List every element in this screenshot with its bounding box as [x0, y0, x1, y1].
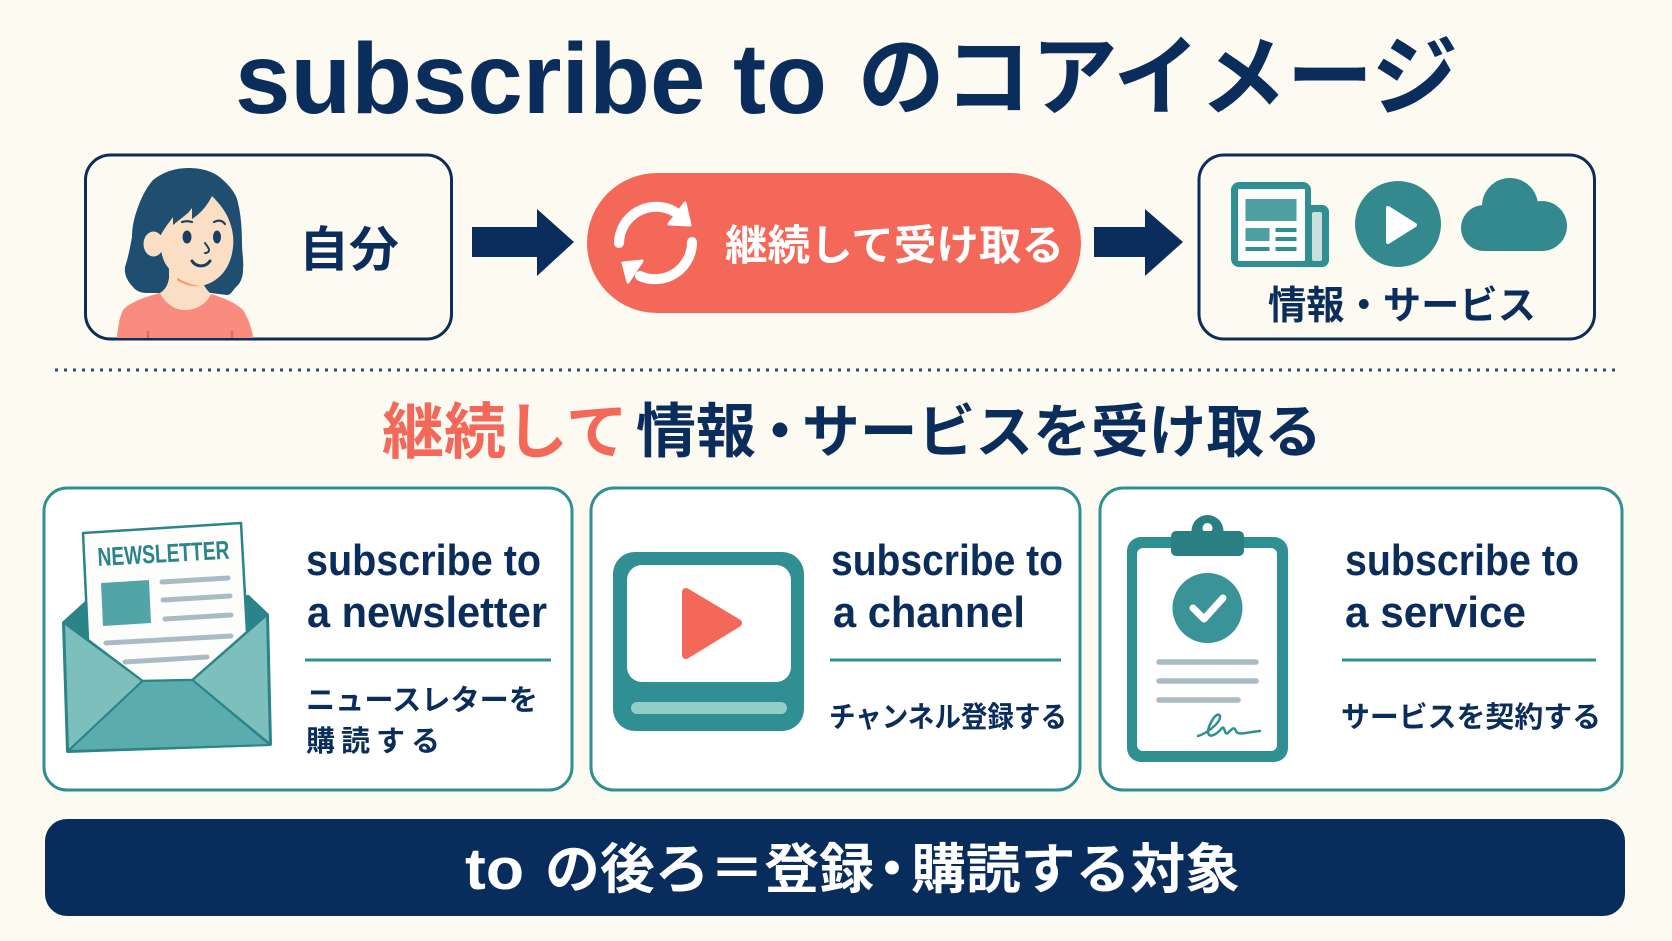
- text: newsletter: 購読する: [306, 725, 440, 758]
- title: [235, 23, 1458, 135]
- icon: newspaper: [1231, 182, 1329, 267]
- subheading: [382, 398, 1322, 466]
- banner: object of to: [45, 819, 1625, 916]
- title: のコアイメージ: [858, 28, 1458, 127]
- text: channel: a channel: [833, 588, 1025, 637]
- subheading: 情報: [636, 399, 756, 465]
- icon: refresh: [619, 203, 692, 282]
- banner: object of to: to: [465, 837, 524, 902]
- text: newsletter: ニュースレターを: [306, 684, 538, 717]
- text: channel: チャンネル登録する: [829, 701, 1067, 734]
- panel: newsletter: [44, 488, 572, 790]
- icon: cloud: [1461, 178, 1567, 251]
- panel: continuous receiving pill: [587, 173, 1081, 313]
- text: service: a service: [1345, 588, 1526, 637]
- text: service: サービスを契約する: [1341, 701, 1601, 734]
- icon: video player: [613, 552, 804, 731]
- arrow: self to action: [472, 209, 574, 276]
- subheading: サービスを受け取る: [802, 400, 1322, 465]
- label: self: 自分: [299, 224, 399, 277]
- title: subscribe to: [235, 23, 827, 135]
- panel: information and services: [1199, 155, 1594, 339]
- text: newsletter: subscribe to: [306, 536, 541, 585]
- subheading: ・: [751, 400, 809, 465]
- label: continuous receiving: 継続して受け取る: [725, 222, 1064, 269]
- text: newsletter: a newsletter: [307, 588, 547, 637]
- banner: object of to: 購読する対象: [911, 840, 1240, 900]
- icon: newsletter envelope: NEWSLETTER: [97, 535, 230, 572]
- text: channel: [829, 536, 1067, 734]
- icon: person: [117, 168, 253, 338]
- dotted divider: [55, 368, 1616, 372]
- panel: self: [86, 155, 452, 339]
- banner: object of to: の後ろ＝登録: [545, 840, 874, 900]
- text: channel: subscribe to: [831, 536, 1063, 585]
- text: service: [1341, 536, 1601, 734]
- text: newsletter: [305, 536, 551, 758]
- label: information and services: 情報・サービス: [1268, 285, 1536, 328]
- panel: channel: [591, 488, 1080, 790]
- text: service: subscribe to: [1345, 536, 1579, 585]
- icon: play: [1355, 181, 1441, 267]
- icon: newsletter envelope: [64, 523, 270, 751]
- arrow: action to info: [1094, 209, 1183, 276]
- subheading: 継続して: [382, 398, 628, 466]
- icon: clipboard: [1127, 515, 1288, 762]
- panel: service: [1100, 488, 1622, 790]
- banner: object of to: ・: [865, 840, 919, 900]
